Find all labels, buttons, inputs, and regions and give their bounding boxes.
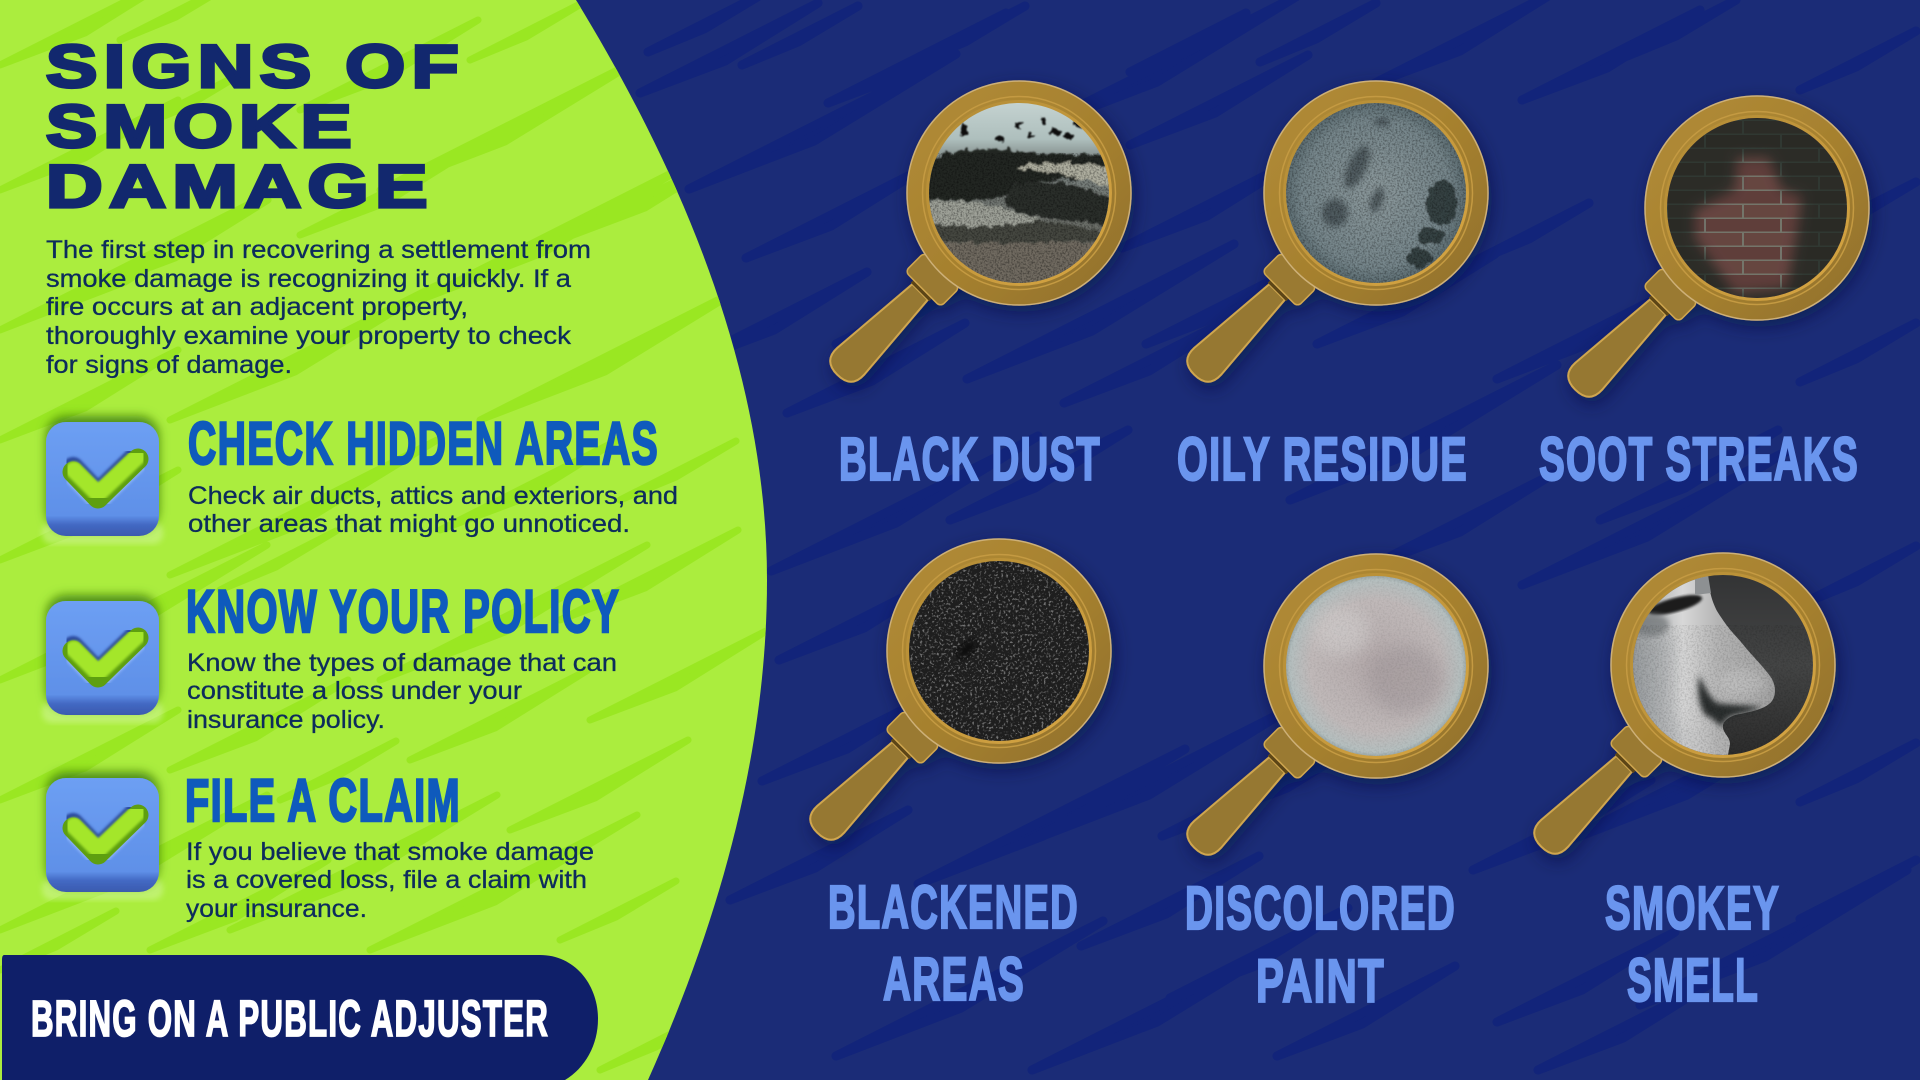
- text: check hidden areas description: other areas that might go unnoticed.: [188, 510, 630, 538]
- magnifier: black dust: [820, 81, 1131, 392]
- checklist item: file a claim: [42, 767, 594, 923]
- icon: checkbox 1: [42, 422, 163, 544]
- text: file a claim description: If you believe that smoke damage: [186, 838, 594, 866]
- checklist item: check hidden areas: [42, 410, 678, 544]
- text: file a claim description: your insurance.: [186, 895, 367, 923]
- heading: file a claim: FILE A CLAIM: [185, 767, 461, 834]
- intro paragraph: thoroughly examine your property to check: [46, 322, 572, 350]
- label: smokey smell: SMELL: [1627, 946, 1759, 1014]
- heading: know your policy: KNOW YOUR POLICY: [186, 578, 620, 645]
- label: smokey smell: SMOKEY: [1605, 874, 1780, 942]
- magnifier: smokey smell: [1524, 553, 1835, 864]
- magnifier: blackened areas: [800, 539, 1111, 850]
- text: file a claim description: [186, 838, 594, 923]
- title: DAMAGE: [46, 153, 434, 220]
- title: SMOKE: [46, 93, 358, 160]
- label: oily residue: OILY RESIDUE: [1177, 425, 1468, 493]
- text: file a claim description: is a covered loss, file a claim with: [186, 866, 587, 894]
- banner: bring on a public adjuster: [2, 955, 598, 1080]
- label: discolored paint: DISCOLORED: [1185, 874, 1456, 942]
- icon: checkbox 2: [42, 601, 163, 723]
- label: black dust: BLACK DUST: [839, 425, 1101, 493]
- intro paragraph: fire occurs at an adjacent property,: [46, 293, 468, 321]
- intro paragraph: The first step in recovering a settlement from: [46, 236, 591, 264]
- label: discolored paint: [1185, 874, 1456, 1015]
- label: discolored paint: PAINT: [1256, 947, 1385, 1015]
- magnifier: oily residue: [1177, 81, 1488, 392]
- text: check hidden areas description: [188, 482, 678, 538]
- text: know your policy description: Know the types of damage that can: [187, 649, 617, 677]
- text: know your policy description: insurance policy.: [187, 706, 385, 734]
- heading: check hidden areas: CHECK HIDDEN AREAS: [188, 410, 659, 477]
- title: [46, 33, 465, 220]
- panel: green curved sidebar: [0, 0, 800, 1080]
- label: blackened areas: AREAS: [883, 945, 1025, 1013]
- label: blackened areas: BLACKENED: [828, 873, 1079, 941]
- banner: bring on a public adjuster: BRING ON A PUBLIC ADJUSTER: [31, 990, 549, 1047]
- icon: checkbox 3: [42, 778, 163, 900]
- intro paragraph: [46, 236, 591, 379]
- title: SIGNS OF: [46, 33, 465, 100]
- magnifier: discolored paint: [1177, 554, 1488, 865]
- background: navy brushed panel: [636, 0, 1920, 1073]
- checklist item: know your policy: [42, 578, 620, 734]
- intro paragraph: for signs of damage.: [46, 351, 292, 379]
- label: smokey smell: [1605, 874, 1780, 1014]
- text: check hidden areas description: Check air ducts, attics and exteriors, and: [188, 482, 678, 510]
- text: know your policy description: [187, 649, 617, 734]
- magnifier: soot streaks: [1558, 96, 1869, 407]
- text: know your policy description: constitute a loss under your: [187, 677, 522, 705]
- label: blackened areas: [828, 873, 1079, 1013]
- intro paragraph: smoke damage is recognizing it quickly. If a: [46, 265, 571, 293]
